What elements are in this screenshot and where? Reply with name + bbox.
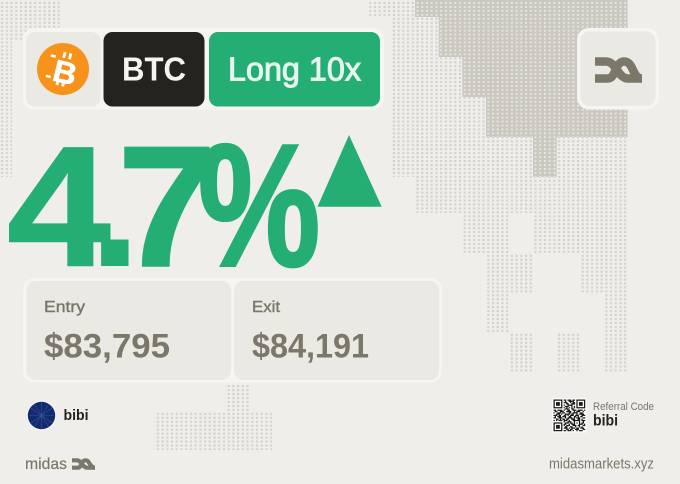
headline: percentage gain [7,109,320,303]
user avatar and name [27,401,88,430]
icon: midas logo mark [595,62,642,78]
headline: percentage gain: % [198,109,320,303]
exit price: $84,191 [252,328,369,366]
badge: Long 10x [209,32,380,106]
entry price: $83,795 [44,328,170,366]
icon: up triangle [318,135,382,207]
QR code [552,398,587,433]
panel: entry and exit prices [23,278,442,382]
website URL: midasmarkets.xyz [549,456,654,472]
panel: midas logo [577,28,659,110]
midas wordmark: midas [25,456,67,473]
QR code and referral code [552,398,654,433]
entry price: Entry [44,299,85,316]
entry price [26,281,231,380]
badge: BTC: BTC [122,52,186,88]
exit price [234,281,439,380]
user avatar and name: bibi [64,408,88,424]
badge: Long 10x: Long 10x [228,52,361,88]
QR code and referral code: Referral Code [593,401,654,413]
headline: percentage gain: . [89,111,141,302]
icon: small logo mark [72,460,95,468]
badge: BTC [104,32,204,106]
headline: percentage gain: 7 [118,111,216,302]
icon: bitcoin coin: B [49,53,81,92]
exit price: Exit [252,299,281,316]
panel: asset and position header [23,28,384,110]
midas wordmark [25,456,95,473]
dotted background pattern: dark blocks [415,0,628,177]
QR code and referral code: bibi [593,412,618,430]
icon: bitcoin coin [26,32,100,106]
headline: percentage gain: 4 [7,111,111,302]
